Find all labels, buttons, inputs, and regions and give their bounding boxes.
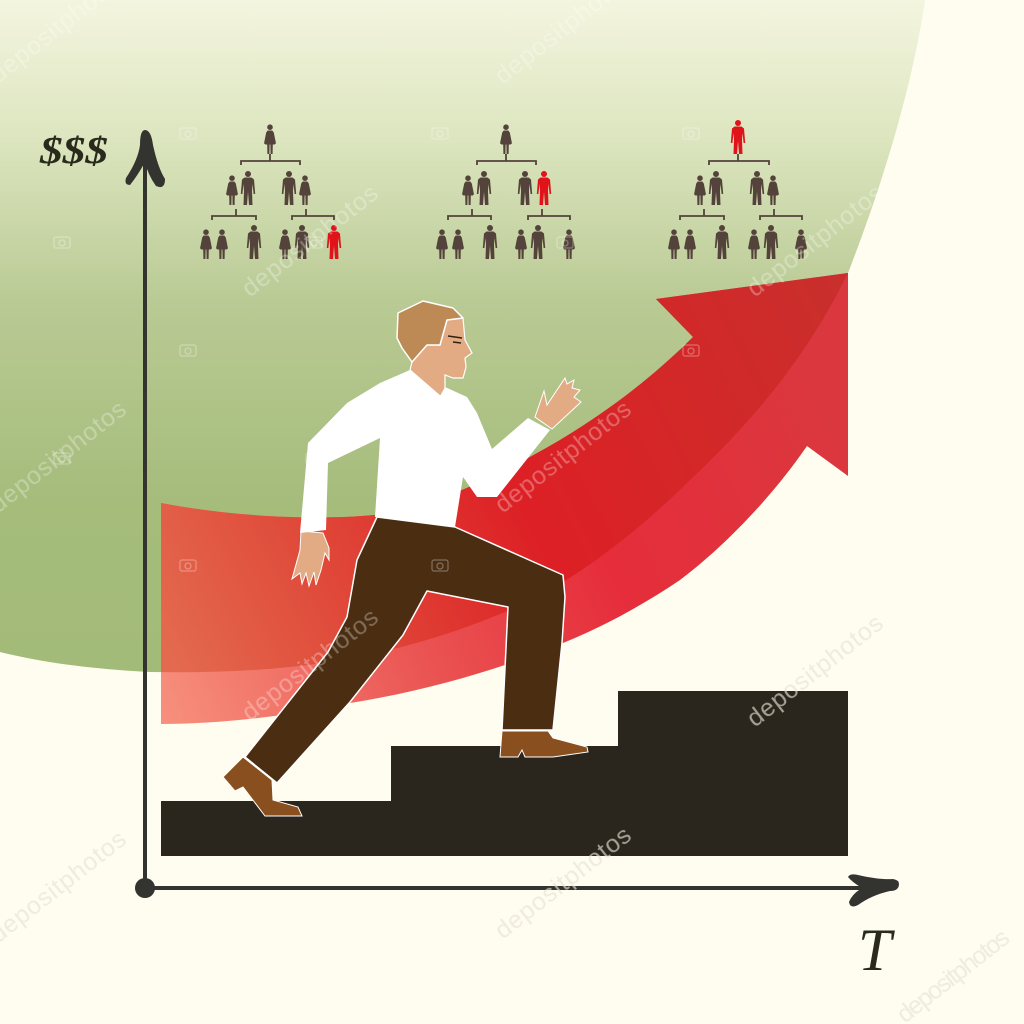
hair [397, 301, 463, 362]
man climbing the stairs [223, 301, 588, 816]
white shirt [300, 370, 550, 533]
front shoe [500, 731, 588, 757]
watermark camera marks [54, 128, 699, 571]
watermarks [0, 0, 889, 727]
back hand [292, 531, 329, 586]
watermarks on stairs and cream [0, 609, 1015, 1024]
eye and mouth [448, 336, 462, 343]
watermarks: depositphotos [741, 179, 889, 303]
watermarks on stairs and cream: depositphotos [489, 821, 637, 945]
horizontal axis [135, 874, 899, 906]
green area under growth curve [0, 0, 925, 672]
raised hand [535, 378, 581, 429]
red growth arrow [161, 273, 848, 724]
pyramid 1 [200, 124, 341, 259]
face and neck [410, 318, 472, 396]
watermarks on stairs and cream: depositphotos [741, 609, 889, 733]
watermarks: depositphotos [236, 179, 384, 303]
back shoe [223, 757, 302, 816]
vertical axis [126, 130, 165, 888]
watermarks: depositphotos [489, 395, 637, 519]
x axis label: T [858, 917, 895, 983]
stairs [161, 691, 848, 856]
y axis label: $$$ [39, 130, 108, 172]
trousers [245, 517, 565, 783]
pyramid 2 [436, 124, 575, 259]
watermarks: depositphotos [236, 603, 384, 727]
pyramid 3 [668, 120, 807, 259]
